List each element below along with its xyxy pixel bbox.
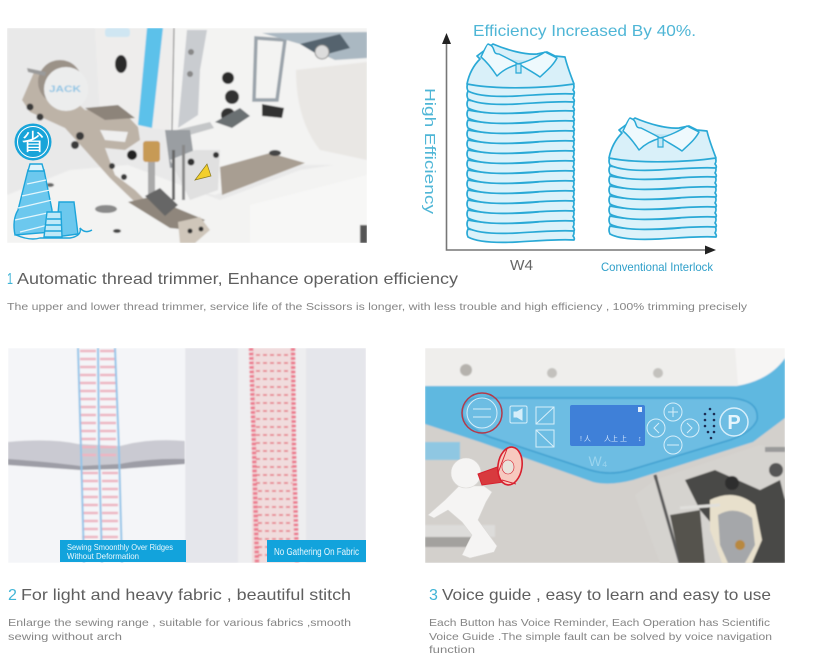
x label: conventional interlock: Conventional Interlock — [601, 260, 714, 274]
speaker dots — [704, 408, 715, 439]
text: feature 2 description — [8, 617, 351, 643]
machine bed — [7, 160, 367, 243]
y axis label: High Efficiency — [421, 88, 438, 215]
chart: efficiency comparison — [421, 23, 716, 274]
icon: thread cones — [14, 164, 92, 239]
heading: feature 1: 1 — [7, 271, 13, 288]
tan cover plate — [220, 153, 305, 195]
caption: no gathering: No Gathering On Fabric — [274, 547, 359, 558]
lcd screen: ↕ — [638, 436, 642, 443]
chart title: Efficiency Increased By 40%. — [473, 23, 696, 40]
heading: feature 2: For light and heavy fabric , beautiful stitch — [21, 587, 351, 604]
x label: W4: W4 — [510, 257, 533, 274]
lcd screen — [570, 405, 645, 446]
icon: thread saving badge — [14, 124, 52, 160]
text: feature 1 description: The upper and lower thread trimmer, service life of the Scissors is longer, with less trouble and high efficiency , 100% trimming precisely — [7, 301, 748, 313]
text: feature 3 description — [429, 617, 772, 656]
text: feature 2 description: Enlarge the sewing range , suitable for various fabrics ,smooth — [8, 617, 351, 629]
text: feature 3 description: Voice Guide .The simple fault can be solved by voice navigation — [429, 631, 772, 643]
text: feature 2 description: sewing without arch — [8, 631, 122, 643]
gold ring — [143, 141, 160, 162]
icon: thread saving badge: 省 — [22, 129, 44, 155]
left machine strip — [425, 442, 460, 460]
text: feature 3 description: function — [429, 644, 475, 656]
upright bracket — [178, 30, 207, 128]
trimmer arm — [22, 72, 144, 202]
axes — [446, 40, 708, 250]
icon: white figure with megaphone — [428, 446, 525, 558]
lcd screen: 人上 上 — [604, 434, 627, 443]
machine head — [95, 28, 175, 130]
panel: thread trimmer photo: JACK — [49, 84, 82, 94]
caption: ridges: Without Deformation — [67, 551, 139, 561]
panel: thread trimmer photo — [7, 28, 367, 243]
stack: conventional interlock shirts — [609, 118, 716, 239]
caption: no gathering — [267, 540, 366, 562]
model mark: W₄ — [589, 453, 608, 469]
panel: stitch photos — [8, 348, 366, 563]
heading: feature 2: 2 — [8, 587, 17, 604]
panel: voice guide control panel photo — [425, 348, 785, 563]
icon: warning triangle — [195, 164, 211, 180]
heading: feature 1: Automatic thread trimmer, Enhance operation efficiency — [17, 271, 458, 288]
lcd screen: ! 人 — [580, 435, 591, 443]
presser foot and plate — [128, 197, 205, 230]
thread knob — [38, 59, 80, 98]
sewing mechanism — [653, 446, 785, 563]
button P: P — [727, 412, 741, 434]
caption: ridges — [60, 540, 186, 562]
heading: feature 3: 3 — [429, 587, 438, 604]
button icons — [467, 398, 748, 454]
centre needle bar — [178, 122, 214, 135]
text: feature 3 description: Each Button has Voice Reminder, Each Operation has Scientific — [429, 617, 770, 629]
caption: ridges: Sewing Smoonthly Over Ridges — [67, 542, 173, 552]
photo: ridge stitching — [8, 348, 185, 563]
stack: W4 shirts — [467, 44, 574, 242]
photo: flat stitching — [185, 348, 366, 563]
callout: highlighted button circle — [462, 393, 502, 433]
heading: feature 3: Voice guide , easy to learn and easy to use — [442, 587, 771, 604]
presser assembly top right — [254, 38, 285, 100]
blue control housing — [425, 358, 785, 484]
